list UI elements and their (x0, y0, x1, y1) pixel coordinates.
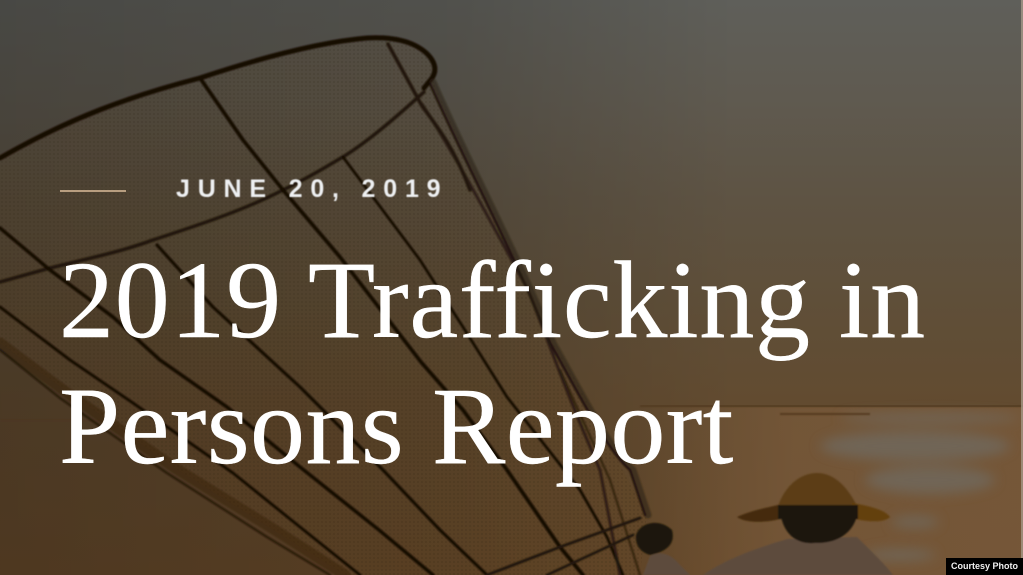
water base (640, 407, 1023, 575)
water shimmer (820, 413, 1020, 561)
photo credit (946, 558, 1023, 575)
photo credit: Courtesy Photo (951, 561, 1018, 571)
net frame (0, 38, 648, 575)
date: JUNE 20, 2019 (176, 175, 448, 203)
title (59, 239, 926, 487)
fisherman silhouette (636, 473, 893, 575)
rim frame right (433, 82, 648, 515)
title: 2019 Trafficking in (59, 239, 926, 361)
title: Persons Report (59, 365, 734, 487)
date rule (60, 190, 126, 192)
hand (636, 523, 673, 555)
net mesh (0, 38, 647, 575)
horizon (0, 406, 1023, 421)
photo edge (1021, 0, 1023, 575)
